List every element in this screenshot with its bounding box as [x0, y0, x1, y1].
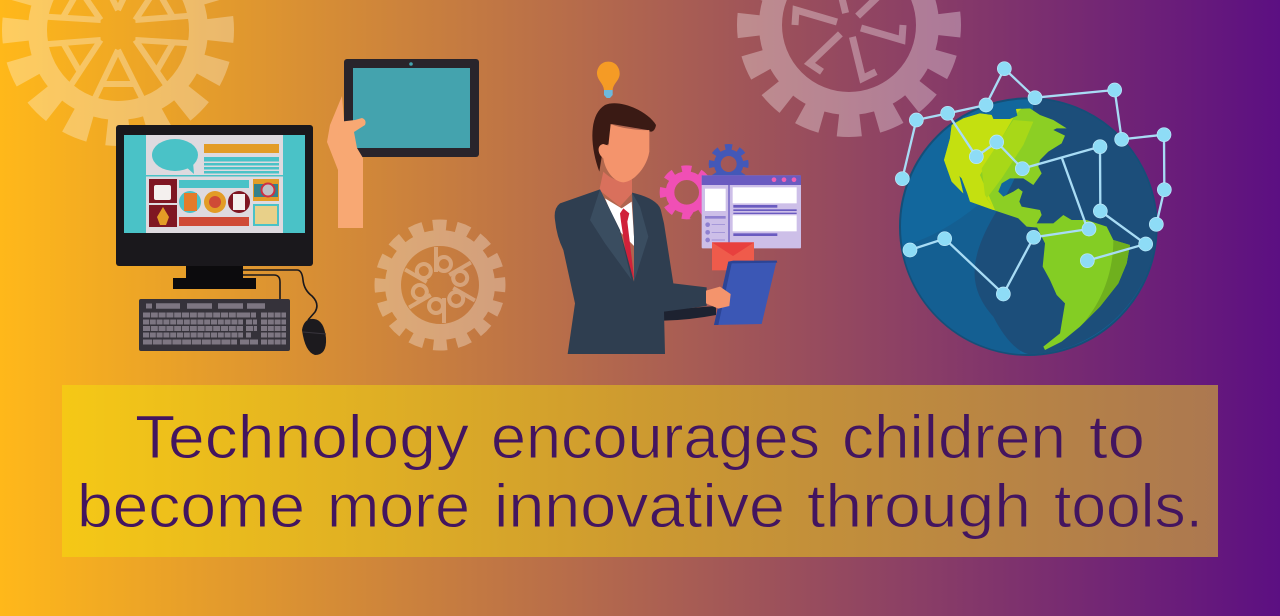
South America	[1036, 215, 1130, 350]
light bulb	[597, 62, 620, 98]
icon: businessman with tablet and gears	[555, 62, 801, 354]
suit	[555, 189, 707, 354]
hair	[592, 103, 656, 172]
caption text: Technology	[135, 403, 470, 471]
globe sphere	[900, 98, 1157, 355]
globe shadow	[975, 99, 1156, 354]
caption text	[77, 403, 1203, 540]
North America	[944, 108, 1066, 228]
rear sleeve	[664, 306, 716, 321]
hand	[706, 287, 731, 309]
keyboard	[139, 299, 290, 351]
shirt	[605, 198, 635, 247]
screen: pen tile	[149, 205, 177, 227]
cables	[243, 270, 317, 320]
icon: globe with network	[895, 62, 1171, 355]
screen: round icons	[179, 191, 250, 213]
caption text: encourages	[491, 403, 820, 471]
neck	[599, 172, 632, 207]
pink gear	[659, 165, 714, 220]
app window	[702, 175, 801, 248]
caption text: through	[807, 472, 1031, 540]
caption text: innovative	[494, 472, 785, 540]
screen: text lines	[146, 144, 283, 176]
screen: calendar tile	[149, 179, 177, 203]
caption text: become	[77, 472, 305, 540]
tie	[620, 208, 634, 280]
envelope	[712, 242, 754, 270]
face	[599, 124, 649, 182]
clipboard tablet	[714, 261, 777, 325]
gear: lower centre with b spokes	[375, 220, 505, 350]
network nodes	[895, 62, 1171, 301]
caption text: to	[1089, 403, 1145, 471]
caption text: children	[842, 403, 1066, 471]
screen: camera tile	[253, 179, 279, 201]
gear: top centre with L spokes	[738, 0, 960, 136]
gear: top left with A spokes	[5, 0, 231, 143]
screen: map tile	[253, 204, 279, 226]
icon: hand holding tablet	[327, 59, 479, 228]
blue gear	[709, 144, 748, 184]
monitor	[116, 125, 313, 266]
caption text: tools.	[1054, 472, 1203, 540]
stand	[173, 266, 256, 289]
network links	[902, 69, 1164, 294]
icon: desktop computer	[116, 125, 326, 355]
screen: bars	[179, 180, 249, 226]
screen: speech bubble	[152, 139, 198, 174]
globe lower shade	[902, 205, 1020, 354]
caption banner	[62, 385, 1218, 557]
lapels	[590, 189, 648, 282]
mouse	[302, 319, 326, 355]
caption text: more	[327, 472, 470, 540]
